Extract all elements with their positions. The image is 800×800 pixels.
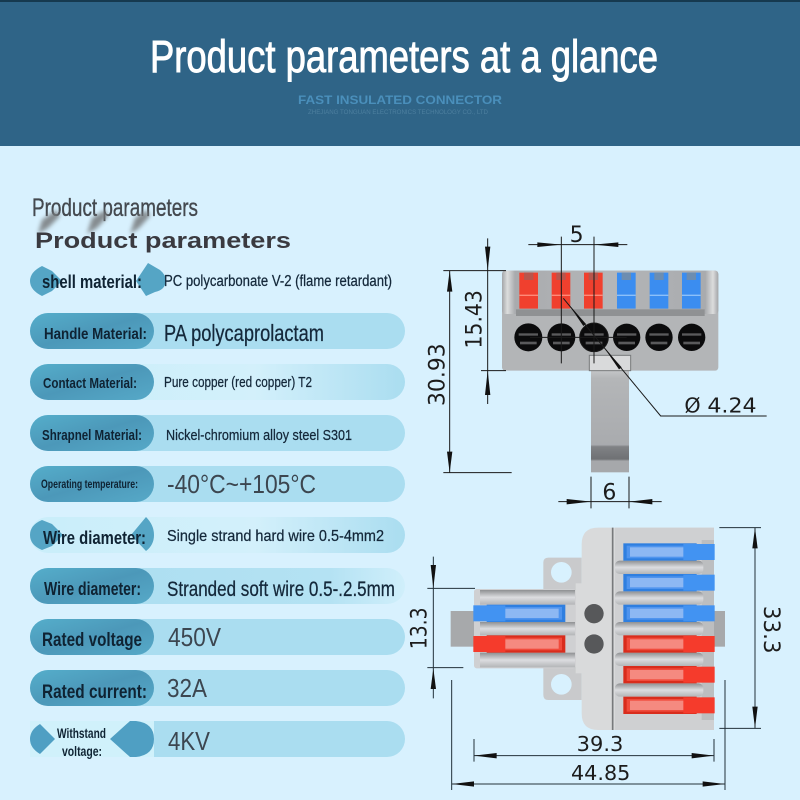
dimension 33.3 [719, 528, 783, 728]
dimension 13.3 [408, 557, 475, 698]
blue levers [617, 273, 701, 309]
dimension 15.43 [443, 238, 506, 404]
row: withstand voltage [30, 721, 405, 759]
pill [30, 517, 405, 553]
screws [584, 604, 604, 654]
pill [30, 721, 405, 757]
label: Wire diameter: [44, 579, 141, 599]
value: 32A [167, 673, 208, 703]
label: Wire diameter: [43, 528, 146, 548]
pill [30, 313, 405, 349]
left block [474, 589, 576, 668]
dimension diameter 4.24 [563, 298, 767, 418]
label second line: voltage: [62, 743, 102, 759]
clip [589, 355, 631, 371]
value: Stranded soft wire 0.5-.2.5mm [167, 578, 395, 601]
value: 450V [168, 622, 222, 652]
section heading [32, 194, 291, 253]
row: contact material [30, 364, 405, 400]
connector body [502, 271, 718, 371]
cap [30, 619, 154, 655]
row: operating temperature [30, 466, 405, 502]
right block shading [615, 528, 714, 730]
label: Rated voltage [42, 630, 142, 651]
dimension 15.43: 15.43 [463, 290, 488, 348]
label: Rated current: [42, 682, 147, 703]
row: single strand wire [30, 517, 405, 553]
cap centre [30, 721, 154, 757]
pill [30, 466, 405, 502]
top view drawing [408, 528, 783, 790]
dimension 44.85: 44.85 [571, 761, 630, 785]
pill [30, 415, 405, 451]
smudges [38, 210, 150, 234]
dimension 30.93: 30.93 [425, 343, 450, 406]
pill [30, 619, 405, 655]
dimension diameter 4.24: 4.24 [707, 394, 757, 418]
dimension diameter 4.24: Ø [684, 394, 701, 418]
label: Contact Material: [43, 375, 137, 392]
dimension 5: 5 [570, 223, 584, 248]
front view drawing [425, 223, 767, 508]
red levers right [623, 635, 715, 714]
cap [30, 364, 154, 400]
cap [30, 670, 154, 706]
lever slot band [516, 309, 705, 316]
row: rated current [30, 670, 405, 706]
value: PC polycarbonate V-2 (flame retardant) [164, 273, 392, 290]
cap [30, 568, 154, 604]
tails [451, 611, 725, 647]
connector tail [591, 370, 629, 472]
dimension 6 [558, 477, 662, 508]
row: shrapnel material [30, 415, 405, 451]
red levers [519, 273, 603, 309]
pill [30, 568, 405, 604]
dimension 30.93 [425, 271, 512, 473]
ears [543, 558, 582, 700]
dimension 13.3: 13.3 [408, 607, 433, 649]
row: rated voltage [30, 619, 405, 655]
subtitle: FAST INSULATED CONNECTOR [298, 95, 503, 107]
holes [514, 323, 705, 352]
label: Handle Material: [44, 326, 147, 343]
dimension 44.85 [452, 680, 725, 790]
heading bold: Product parameters [35, 228, 291, 253]
value: -40°C~+105°C [167, 469, 316, 499]
label: shell material: [42, 272, 142, 292]
dimension 5 [528, 223, 627, 363]
value: PA polycaprolactam [164, 320, 324, 346]
ear holes [551, 562, 572, 695]
cap blobs [30, 721, 154, 757]
cap [30, 313, 154, 349]
row: handle material [30, 313, 405, 349]
dimension 39.3 [474, 732, 714, 762]
cap blobs [30, 517, 154, 551]
dimension 39.3: 39.3 [577, 732, 623, 756]
pill [30, 670, 405, 706]
row: stranded wire [30, 568, 405, 604]
label: Withstand [57, 725, 106, 741]
value: Pure copper (red copper) T2 [164, 374, 312, 391]
cap [30, 415, 154, 451]
pill [30, 364, 405, 400]
label: Shrapnel Material: [42, 428, 142, 444]
header banner [0, 0, 800, 146]
value: Single strand hard wire 0.5-4mm2 [167, 528, 384, 545]
connector upper band [502, 271, 718, 314]
label: Operating temperature: [41, 477, 138, 491]
heading light: Product parameters [32, 194, 198, 222]
value: Nickel-chromium alloy steel S301 [166, 427, 352, 444]
main block [582, 528, 714, 730]
cap [30, 466, 154, 502]
dimension 6: 6 [602, 480, 616, 505]
left block gaps [480, 590, 575, 667]
blue levers right [623, 543, 715, 622]
left levers [473, 605, 565, 653]
title: Product parameters at a glance [150, 31, 658, 82]
dimension 33.3: 33.3 [758, 606, 783, 653]
value: 4KV [168, 726, 211, 756]
cap blobs [30, 263, 166, 296]
row: shell material [30, 263, 392, 296]
company line: ZHEJIANG TONGUAN ELECTRONICS TECHNOLOGY CO., LTD [308, 110, 489, 116]
